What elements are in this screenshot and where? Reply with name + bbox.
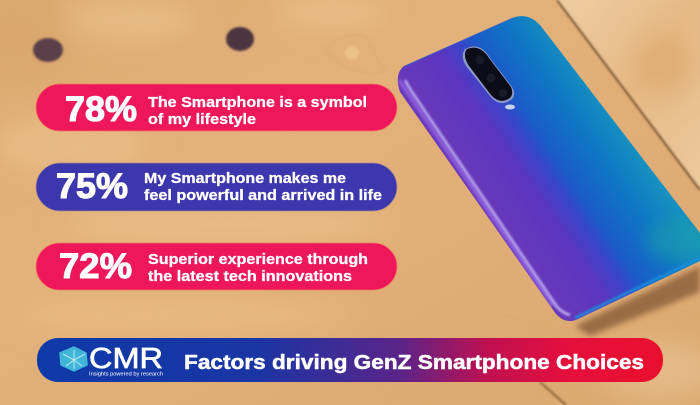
stat description: the latest tech innovations bbox=[148, 268, 352, 285]
stat description: feel powerful and arrived in life bbox=[144, 187, 382, 204]
stat pill 75% bbox=[36, 163, 397, 211]
stat description bbox=[148, 251, 368, 285]
stat description: of my lifestyle bbox=[148, 111, 256, 128]
plank seams bbox=[540, 0, 700, 405]
stat pill 78% bbox=[36, 84, 397, 131]
stat description bbox=[144, 170, 382, 204]
smartphone bbox=[398, 16, 700, 321]
wood knots bbox=[33, 27, 385, 73]
stat value: 78% bbox=[65, 90, 137, 129]
camera module bbox=[463, 46, 514, 103]
stat value: 72% bbox=[59, 247, 132, 286]
CMR logo bbox=[60, 343, 163, 378]
stat value: 75% bbox=[56, 167, 128, 206]
stat description: My Smartphone makes me bbox=[144, 170, 346, 187]
stat description: Superior experience through bbox=[148, 251, 368, 268]
stat description: The Smartphone is a symbol bbox=[148, 94, 367, 111]
CMR logo: CMR bbox=[89, 343, 163, 375]
stat pill 72% bbox=[36, 243, 397, 290]
logo tagline: Insights powered by research bbox=[89, 372, 163, 378]
stat description bbox=[148, 94, 367, 128]
camera flash bbox=[505, 104, 515, 110]
icon: cube logo bbox=[60, 347, 87, 371]
banner title: Factors driving GenZ Smartphone Choices bbox=[184, 351, 644, 374]
phone shadow bbox=[575, 266, 700, 336]
bottom banner bbox=[37, 338, 663, 382]
